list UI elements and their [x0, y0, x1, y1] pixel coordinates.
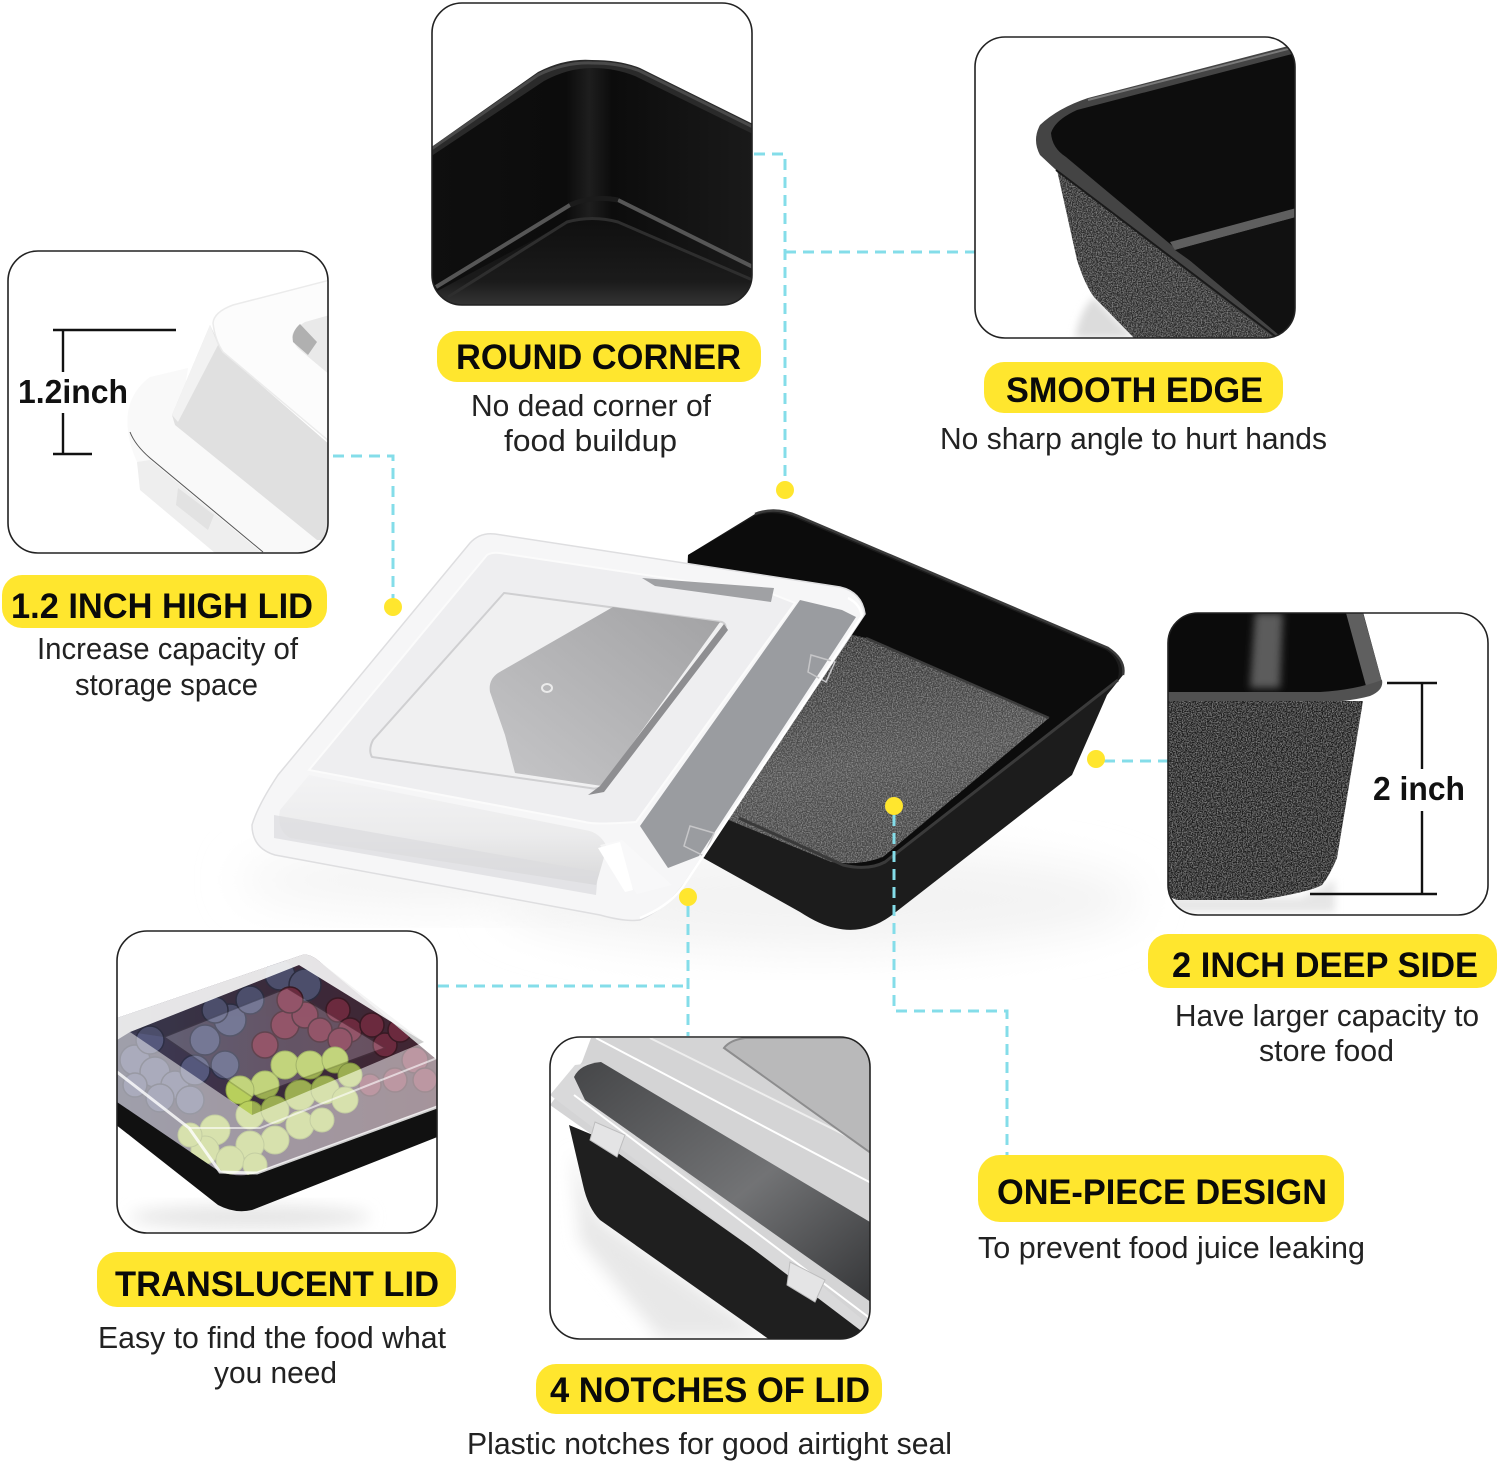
- panel: deep side photo: [1165, 612, 1488, 915]
- label: deep side: [1148, 934, 1497, 988]
- panel: round corner photo: [430, 3, 755, 310]
- label: translucent lid: [97, 1252, 456, 1307]
- text: high lid description: storage space: [75, 667, 258, 702]
- panel: smooth edge photo: [975, 37, 1300, 340]
- text: high lid description: Increase capacity of: [37, 631, 298, 666]
- text: translucent description: [98, 1320, 446, 1390]
- text: round corner description: No dead corner of: [471, 388, 711, 423]
- text: deep side description: store food: [1259, 1033, 1394, 1068]
- text: high lid description: [37, 631, 298, 702]
- panel: high lid photo: [8, 251, 330, 555]
- panel: translucent lid photo: [110, 931, 445, 1233]
- central product: pan with lid: [252, 510, 1123, 930]
- pan rim highlights: [739, 510, 1123, 867]
- lid top flange glare: [117, 955, 424, 1042]
- connector: deep side: [1104, 760, 1168, 762]
- label: deep side: 2 INCH DEEP SIDE: [1172, 946, 1478, 985]
- lid edge highlight: [640, 598, 862, 918]
- marker dots: [384, 481, 1105, 906]
- connector: round corner and smooth edge: [754, 154, 975, 482]
- text: smooth edge description: No sharp angle to hurt hands: [940, 421, 1327, 456]
- right plate edge: [588, 624, 728, 795]
- label: one-piece design: [978, 1155, 1344, 1222]
- pan floor: [680, 600, 1049, 863]
- lid outer flange: [252, 534, 865, 920]
- text: translucent description: you need: [214, 1355, 337, 1390]
- lid front band: [274, 815, 598, 895]
- panel: notches photo: [550, 1037, 875, 1340]
- label: high lid: 1.2 INCH HIGH LID: [11, 587, 313, 626]
- label: round corner: ROUND CORNER: [456, 338, 741, 377]
- lid centre plate: [164, 988, 385, 1097]
- lid corner reflection: [600, 840, 672, 894]
- dimension: 2 inch: 2 inch: [1373, 770, 1465, 807]
- label: one-piece design: ONE-PIECE DESIGN: [997, 1173, 1327, 1212]
- text: deep side description: Have larger capacity to: [1175, 998, 1479, 1033]
- lid see-through band: [640, 600, 856, 868]
- text: notches description: Plastic notches for good airtight seal: [467, 1426, 952, 1461]
- lid sloped front: [279, 775, 607, 885]
- connector: high lid: [333, 456, 393, 598]
- pan base: [115, 1098, 440, 1211]
- lid top dark strip: [642, 578, 774, 602]
- lid sloped inner rim: [130, 965, 424, 1115]
- text: deep side description: [1175, 998, 1479, 1068]
- label: round corner: [437, 331, 761, 382]
- lid front rim: [117, 1072, 437, 1173]
- label: smooth edge: [984, 362, 1283, 413]
- text: translucent description: Easy to find the food what: [98, 1320, 446, 1355]
- dimension: 2 inch: [1310, 683, 1465, 894]
- dimension: 1.2 inch: 1.2inch: [18, 373, 128, 410]
- connector: translucent lid and notches: [438, 906, 688, 1036]
- lid raised plate: [370, 593, 726, 789]
- dimension: 1.2 inch: [18, 330, 176, 454]
- food under lid: [110, 950, 445, 1180]
- label: notches of lid: 4 NOTCHES OF LID: [550, 1371, 870, 1410]
- pan body: [680, 510, 1123, 930]
- text: round corner description: food buildup: [504, 423, 677, 458]
- label: translucent lid: TRANSLUCENT LID: [115, 1265, 439, 1304]
- pan interior: [680, 513, 1119, 867]
- lid shelf: [309, 553, 795, 824]
- label: smooth edge: SMOOTH EDGE: [1006, 371, 1263, 410]
- connector: one-piece design: [894, 815, 1007, 1155]
- text: one-piece description: To prevent food juice leaking: [978, 1230, 1365, 1265]
- hole in lid: [542, 684, 552, 692]
- lid flange overlay: [117, 955, 437, 1175]
- background shadow: [240, 850, 1140, 950]
- cup silhouette seen through lid: [490, 607, 720, 786]
- label: high lid: [2, 575, 327, 628]
- text: round corner description: [471, 388, 711, 458]
- lid notches: [684, 655, 835, 856]
